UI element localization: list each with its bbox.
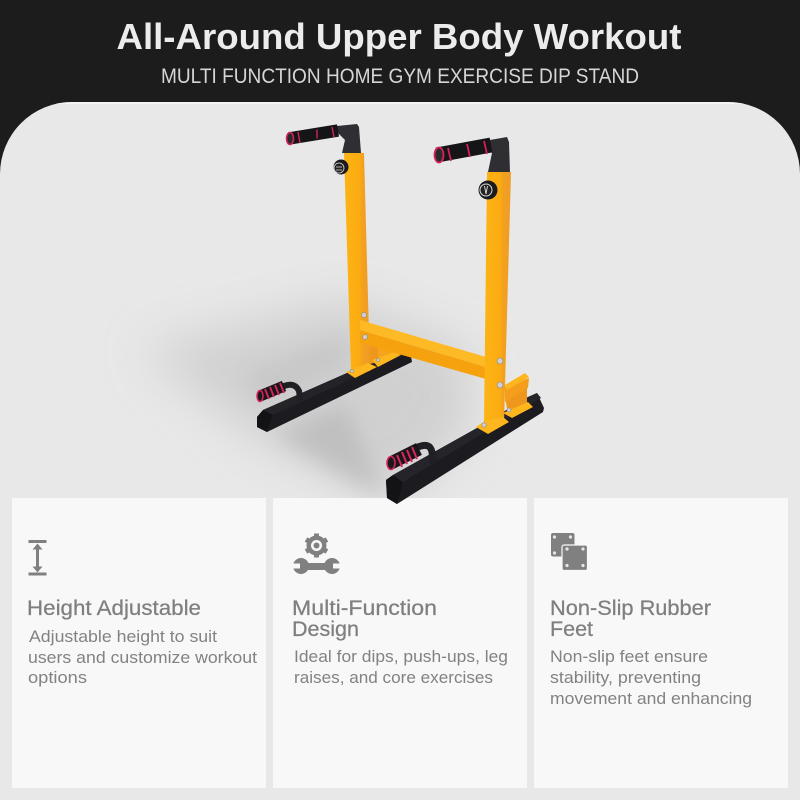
description: movement and enhancing [550, 689, 752, 708]
heading: Feet [550, 618, 593, 641]
description [550, 647, 752, 708]
description: Ideal for dips, push-ups, leg [294, 647, 508, 666]
left upper handle [286, 124, 361, 153]
description: Adjustable height to suit [29, 627, 217, 646]
left foot handle [257, 383, 300, 402]
left front foot plate [346, 363, 377, 378]
left adjustment knob [334, 160, 348, 174]
subtitle: MULTI FUNCTION HOME GYM EXERCISE DIP STAND [161, 65, 639, 88]
icon: rubber pads [551, 533, 588, 570]
description: users and customize workout [28, 648, 257, 667]
description [294, 647, 508, 687]
panel: multi-function design [273, 498, 527, 788]
heading: Design [292, 618, 359, 641]
right post [484, 172, 511, 423]
left rear foot bracket [364, 336, 401, 367]
icon: gear and wrench [292, 534, 341, 574]
right upper handle [434, 137, 510, 172]
title: All-Around Upper Body Workout [116, 16, 682, 57]
heading: Multi-Function [292, 597, 437, 620]
description [28, 627, 257, 687]
right rear foot bracket [503, 373, 533, 418]
right base bar [386, 393, 544, 504]
right adjustment knob [478, 180, 498, 200]
description: Non-slip feet ensure [550, 647, 708, 666]
bolts [350, 312, 511, 427]
description: options [28, 668, 87, 687]
right foot handle [387, 445, 433, 470]
floor shadow [140, 300, 470, 505]
description: raises, and core exercises [294, 668, 493, 687]
heading [550, 597, 711, 641]
right front foot plate [476, 417, 509, 434]
icon: height arrows [28, 540, 46, 576]
crossbar [360, 320, 486, 379]
heading: Non-Slip Rubber [550, 597, 711, 620]
heading [292, 597, 437, 641]
panel: non-slip rubber feet [534, 498, 788, 788]
left post [344, 153, 370, 371]
panel: height adjustable [12, 498, 266, 788]
product: dip stand [257, 124, 544, 504]
description: stability, preventing [550, 668, 701, 687]
left base bar [257, 348, 412, 432]
heading: Height Adjustable [27, 597, 201, 620]
